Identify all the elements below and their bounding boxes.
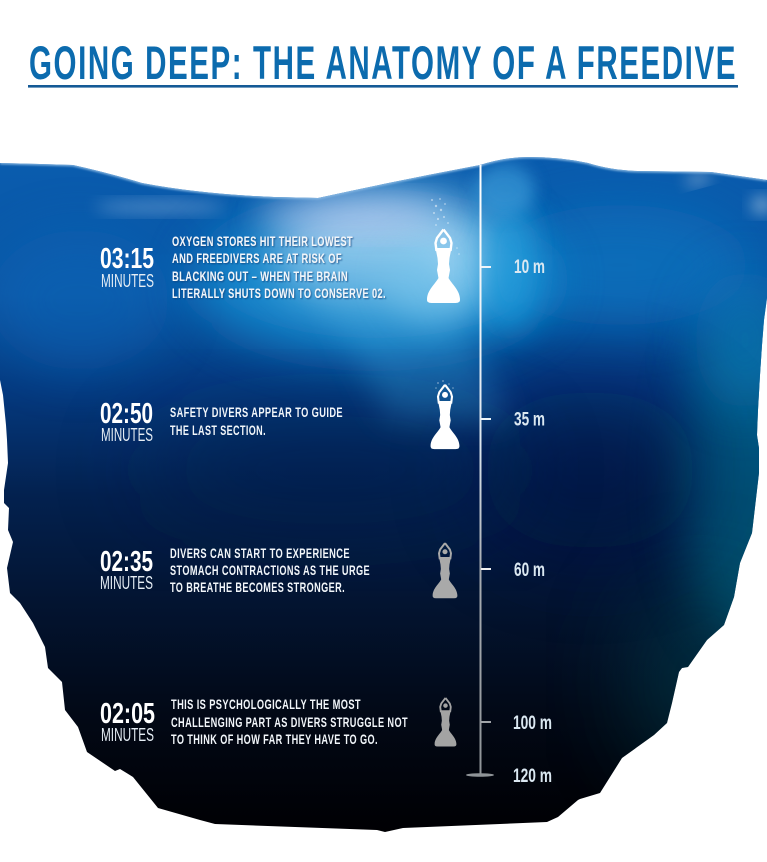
entry: 02:50 minutes: THE LAST SECTION. — [170, 422, 266, 438]
entry: 02:35 minutes — [100, 545, 370, 595]
entry: 03:15 minutes: MINUTES — [101, 271, 154, 291]
entry: 02:35 minutes: DIVERS CAN START TO EXPERIENCE — [170, 545, 350, 561]
entry: 02:50 minutes: SAFETY DIVERS APPEAR TO GUIDE — [170, 404, 343, 420]
label: 35 m: 35 m — [514, 410, 545, 430]
icon: bubbles above second diver — [435, 380, 454, 389]
entry: 03:15 minutes: LITERALLY SHUTS DOWN TO CONSERVE 02. — [172, 285, 386, 301]
entry: 02:50 minutes: MINUTES — [101, 425, 153, 445]
entry: 03:15 minutes: 03:15 — [100, 243, 154, 275]
depth scale — [466, 165, 494, 777]
entry: 02:05 minutes: MINUTES — [101, 725, 154, 745]
entry: 03:15 minutes: AND FREEDIVERS ARE AT RISK OF — [172, 250, 342, 266]
icon: diver at 35 m — [431, 385, 459, 449]
entry: 03:15 minutes — [100, 233, 386, 301]
entry: 02:35 minutes: 02:35 — [100, 546, 153, 578]
entry: 03:15 minutes: BLACKING OUT – WHEN THE BRAIN — [172, 268, 348, 284]
entry: 02:50 minutes — [100, 398, 343, 445]
entry: 02:35 minutes: MINUTES — [100, 573, 153, 593]
entry: 02:05 minutes: TO THINK OF HOW FAR THEY HAVE TO GO. — [171, 731, 378, 747]
icon: diver at 10 m — [427, 230, 460, 303]
icon: bubbles above first diver — [431, 198, 460, 255]
label: 120 m: 120 m — [513, 766, 552, 787]
label: 60 m: 60 m — [514, 560, 545, 581]
entry: 02:35 minutes: STOMACH CONTRACTIONS AS THE URGE — [170, 562, 370, 578]
entry: 02:35 minutes: TO BREATHE BECOMES STRONGER. — [170, 579, 345, 595]
label: 10 m: 10 m — [514, 257, 545, 278]
entry: 02:50 minutes: 02:50 — [100, 398, 153, 430]
entry: 02:05 minutes — [100, 696, 408, 747]
entry: 02:05 minutes: 02:05 — [100, 698, 155, 730]
entry: 02:05 minutes: THIS IS PSYCHOLOGICALLY THE MOST — [171, 696, 361, 712]
entry: 02:05 minutes: CHALLENGING PART AS DIVERS STRUGGLE NOT — [171, 714, 408, 730]
label: 100 m: 100 m — [513, 713, 552, 734]
icon: diver at 60 m — [433, 543, 457, 598]
icon: diver at 100 m — [435, 698, 456, 746]
entry: 03:15 minutes: OXYGEN STORES HIT THEIR LOWEST — [172, 233, 353, 249]
